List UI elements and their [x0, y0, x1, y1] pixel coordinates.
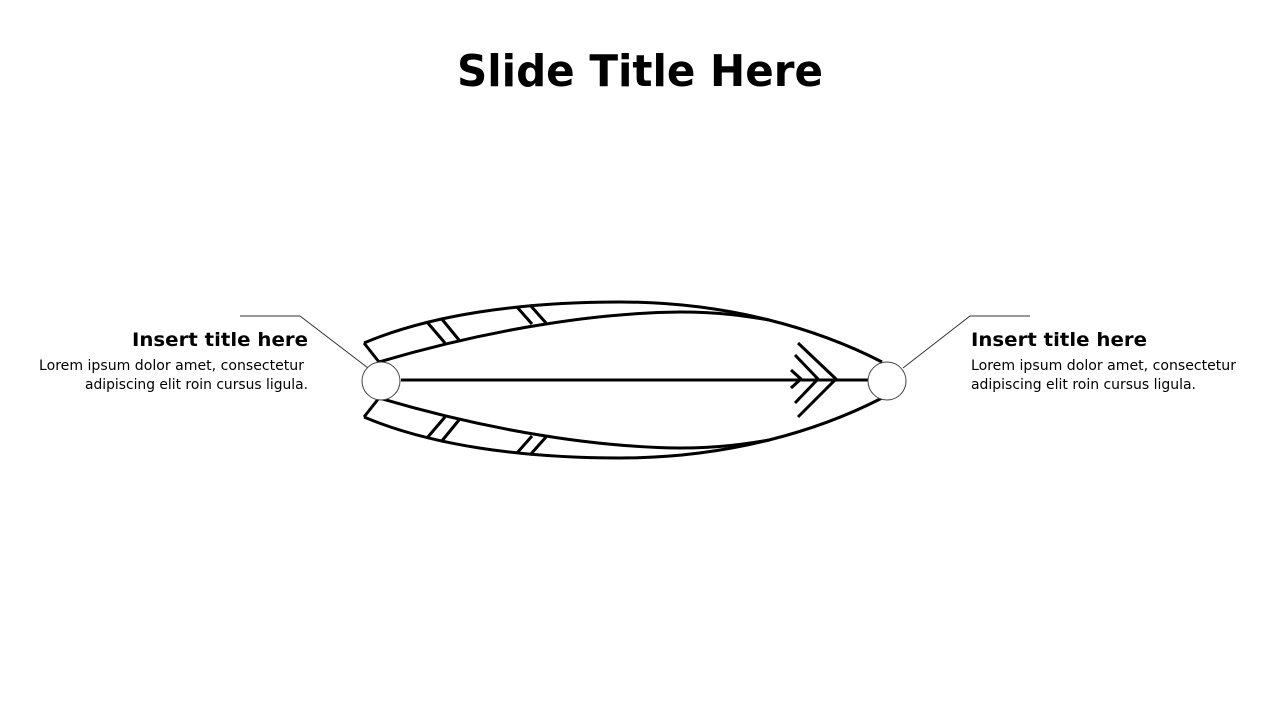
arrowhead chevrons	[791, 343, 836, 417]
right text block	[971, 329, 1236, 393]
right callout line	[903, 316, 1030, 368]
diagram: feather arrow	[364, 302, 882, 458]
right text block: Insert title here	[971, 329, 1147, 351]
left text block	[39, 329, 308, 393]
bottom feather	[364, 398, 882, 458]
top feather	[364, 302, 882, 362]
title: Slide Title Here	[457, 46, 823, 97]
right node circle	[868, 362, 906, 400]
left text block: Lorem ipsum dolor amet, consectetur	[39, 358, 304, 374]
left text block: Insert title here	[132, 329, 308, 351]
right text block: Lorem ipsum dolor amet, consectetur	[971, 358, 1236, 374]
left callout line	[240, 316, 368, 368]
left node circle	[362, 362, 400, 400]
right text block: adipiscing elit roin cursus ligula.	[971, 377, 1196, 393]
left text block: adipiscing elit roin cursus ligula.	[85, 377, 308, 393]
arrow shaft	[401, 378, 868, 382]
